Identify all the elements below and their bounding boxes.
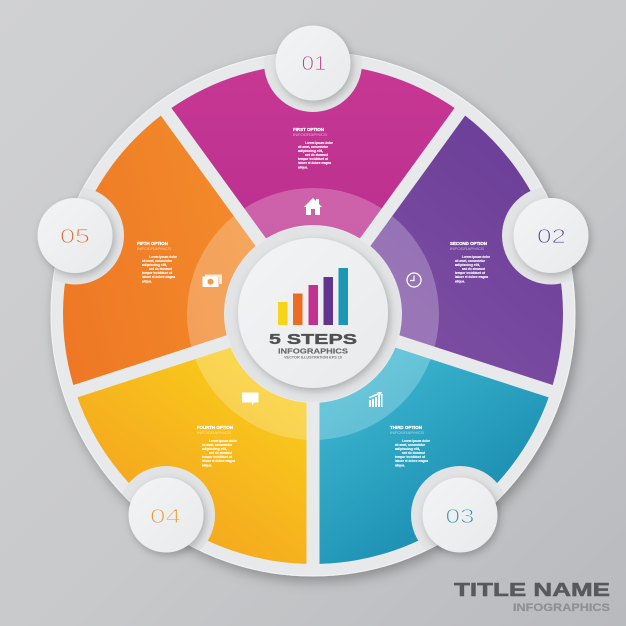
text: second option: sit amet, consectetur xyxy=(455,259,485,263)
badge 01 xyxy=(276,26,350,100)
text: second option: aliqua. xyxy=(455,280,465,284)
text: first option xyxy=(293,127,333,170)
badge 03: 03 xyxy=(446,506,474,528)
hub subtitle: INFOGRAPHICS xyxy=(278,346,348,356)
text: fourth option: aliqua. xyxy=(202,464,212,468)
badge 05: 05 xyxy=(60,226,90,248)
wheel base disc xyxy=(51,52,575,576)
text: first option: Lorem ipsum dolor xyxy=(305,141,333,145)
text: second option xyxy=(450,241,490,284)
panel: second option xyxy=(341,102,594,425)
bar chart xyxy=(278,268,348,325)
text: fourth option: adipiscing elit, xyxy=(202,447,227,451)
text: first option: sed do eiusmod xyxy=(305,153,329,157)
text: fourth option: Lorem ipsum dolor xyxy=(209,439,237,443)
text: first option: aliqua. xyxy=(298,166,308,170)
text: fifth option: labore et dolore magna xyxy=(142,275,176,279)
badge 04 xyxy=(128,478,204,552)
text: fifth option: Lorem ipsum dolor xyxy=(149,255,177,259)
icon: banknotes xyxy=(202,274,222,287)
text: second option: adipiscing elit, xyxy=(455,263,480,267)
center hub xyxy=(225,226,401,402)
text: fifth option: adipiscing elit, xyxy=(142,263,167,267)
text: second option: INFOGRAPHICS xyxy=(450,247,485,251)
text: fifth option: aliqua. xyxy=(142,280,152,284)
text: second option: tempor incididunt ut xyxy=(455,271,486,275)
text: fourth option: INFOGRAPHICS xyxy=(197,431,232,435)
text: second option: SECOND OPTION xyxy=(450,241,487,246)
text: fourth option: sed do eiusmod xyxy=(209,451,233,455)
badge 05 xyxy=(38,198,112,273)
text: fifth option xyxy=(137,241,177,284)
text: fourth option: sit amet, consectetur xyxy=(202,443,232,447)
text: fifth option: FIFTH OPTION xyxy=(137,241,168,246)
icon: home xyxy=(304,198,322,215)
text: fourth option: labore et dolore magna xyxy=(202,459,236,463)
title name: TITLE NAME xyxy=(454,580,610,600)
text: second option: sed do eiusmod xyxy=(462,267,486,271)
number badge cutouts xyxy=(54,54,572,550)
subtitle infographics: INFOGRAPHICS xyxy=(513,602,610,614)
panel: first option xyxy=(171,64,455,238)
text: first option: tempor incididunt ut xyxy=(298,157,329,161)
text: second option: Lorem ipsum dolor xyxy=(462,255,490,259)
text: first option: sit amet, consectetur xyxy=(298,145,328,149)
text: third option xyxy=(390,425,430,468)
hub caption: VECTOR ILLUSTRATION EPS 10 xyxy=(284,356,342,360)
text: fourth option xyxy=(197,425,237,468)
badge 01: 01 xyxy=(302,53,326,75)
text: third option: sed do eiusmod xyxy=(402,451,426,455)
text: third option: THIRD OPTION xyxy=(390,425,422,430)
text: third option: labore et dolore magna xyxy=(395,459,429,463)
text: first option: labore et dolore magna xyxy=(298,161,332,165)
text: fifth option: tempor incididunt ut xyxy=(142,271,173,275)
icon: rising chart xyxy=(369,392,382,407)
text: third option: INFOGRAPHICS xyxy=(390,431,425,435)
panel: fifth option xyxy=(32,102,285,425)
text: third option: sit amet, consectetur xyxy=(395,443,425,447)
text: third option: Lorem ipsum dolor xyxy=(402,439,430,443)
text: third option: adipiscing elit, xyxy=(395,447,420,451)
text: fifth option: sit amet, consectetur xyxy=(142,259,172,263)
text: fourth option: FOURTH OPTION xyxy=(197,425,233,430)
hub title: 5 STEPS xyxy=(269,331,357,348)
text: fourth option: tempor incididunt ut xyxy=(202,455,233,459)
badge 04: 04 xyxy=(150,506,181,528)
panel: fourth option xyxy=(52,292,383,599)
text: second option: labore et dolore magna xyxy=(455,275,489,279)
badge 02 xyxy=(514,198,588,273)
text: fifth option: INFOGRAPHICS xyxy=(137,247,172,251)
badge 03 xyxy=(422,478,498,552)
text: first option: FIRST OPTION xyxy=(293,127,324,132)
text: fifth option: sed do eiusmod xyxy=(149,267,173,271)
icon: speech bubble xyxy=(242,392,258,406)
icon: clock xyxy=(407,273,421,287)
text: first option: adipiscing elit, xyxy=(298,149,323,153)
text: first option: INFOGRAPHICS xyxy=(293,133,328,137)
text: third option: tempor incididunt ut xyxy=(395,455,426,459)
badge 02: 02 xyxy=(537,226,566,248)
panel: third option xyxy=(243,292,574,599)
text: third option: aliqua. xyxy=(395,464,405,468)
